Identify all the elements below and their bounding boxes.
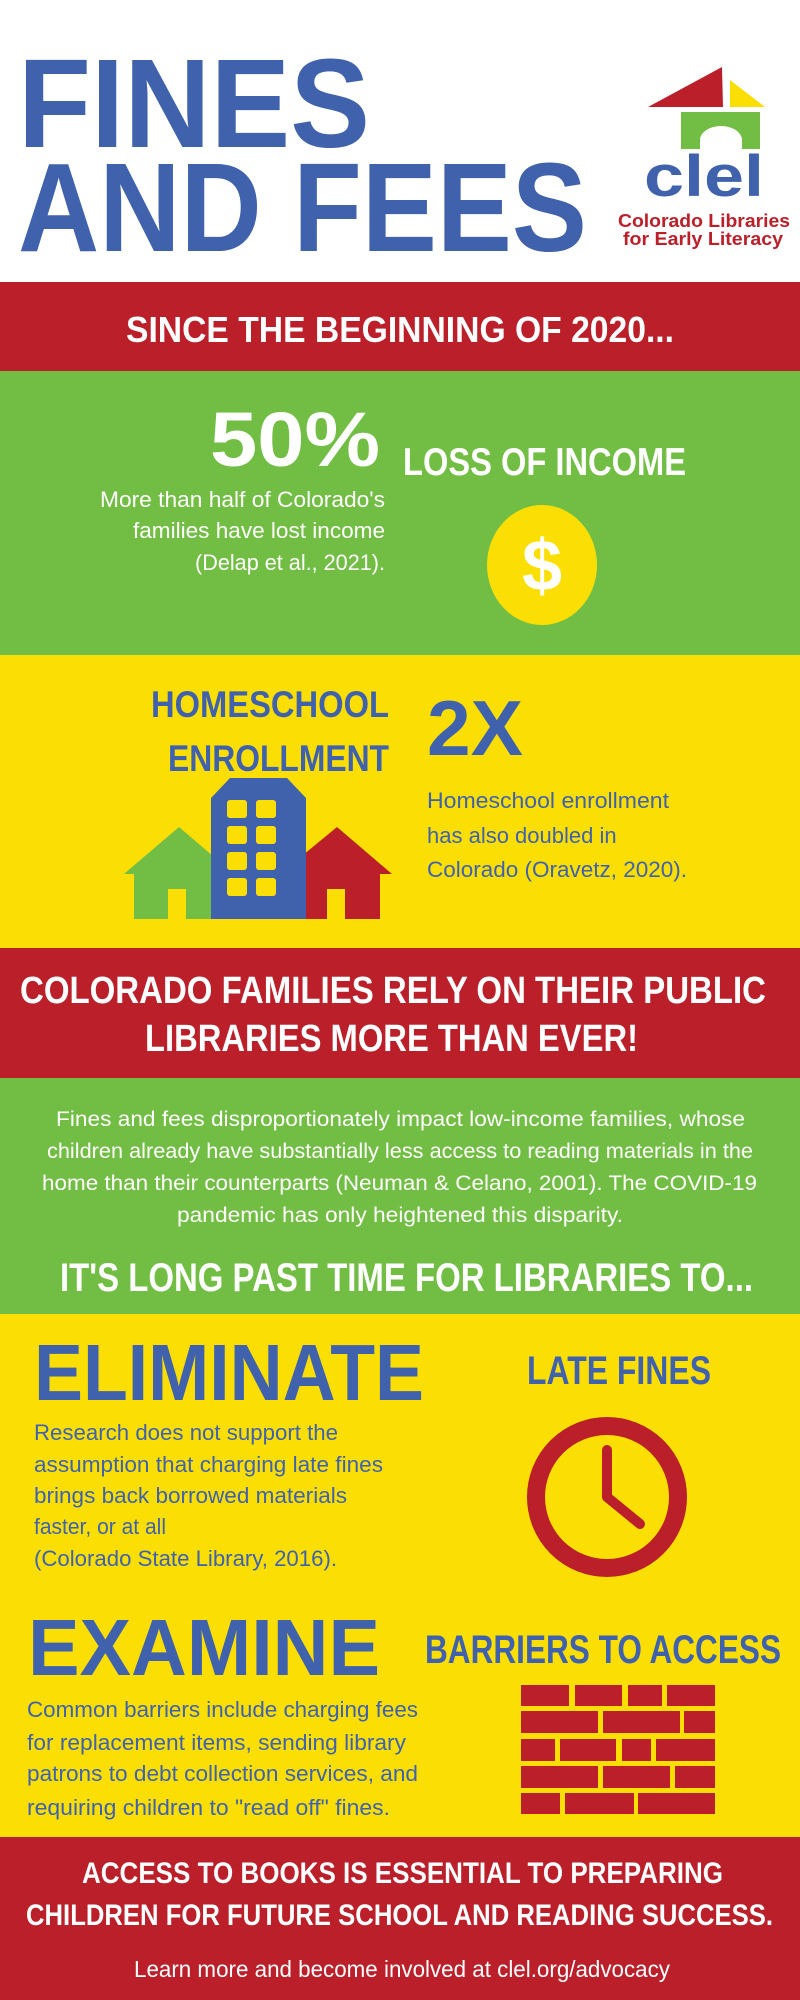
text: disparity paragraph: Fines and fees disproportionately impact low-income families, whose xyxy=(56,1108,745,1131)
text: eliminate paragraph: faster, or at all xyxy=(34,1514,166,1539)
text: homeschool description: Colorado (Oravetz, 2020). xyxy=(427,857,687,882)
text: examine paragraph: requiring children to "read off" fines. xyxy=(27,1795,390,1820)
text: examine paragraph: for replacement items, sending library xyxy=(27,1730,406,1755)
title: FINES xyxy=(18,33,370,174)
icon: houses xyxy=(124,778,392,919)
icon: dollar coin xyxy=(487,505,597,625)
icon: clock xyxy=(536,1426,678,1568)
footer banner: ACCESS TO BOOKS IS ESSENTIAL TO PREPARING xyxy=(82,1857,723,1890)
text: income description: families have lost income xyxy=(133,518,385,543)
title: AND FEES xyxy=(18,137,587,278)
logo: CLEL: Colorado Libraries xyxy=(618,211,790,231)
heading: loss of income: LOSS OF INCOME xyxy=(403,441,686,484)
panel: eliminate / examine xyxy=(0,1314,800,1837)
banner: rely on libraries xyxy=(0,948,800,1078)
text: examine paragraph xyxy=(27,1697,418,1820)
text: disparity paragraph: children already have substantially less access to reading materials in the xyxy=(47,1140,753,1163)
banner: since 2020 xyxy=(0,282,800,371)
text: examine paragraph: patrons to debt collection services, and xyxy=(27,1761,418,1786)
logo: CLEL: for Early Literacy xyxy=(623,229,783,249)
text: homeschool description: has also doubled in xyxy=(427,823,617,848)
text: eliminate paragraph: Research does not support the xyxy=(34,1420,338,1445)
panel: loss of income xyxy=(0,371,800,655)
heading: homeschool enrollment xyxy=(151,684,389,779)
logo: CLEL xyxy=(618,67,790,249)
footer banner xyxy=(0,1837,800,2000)
text: eliminate paragraph: brings back borrowed materials xyxy=(34,1483,347,1508)
panel: homeschool xyxy=(0,655,800,948)
stat: 2X: 2X xyxy=(427,684,523,772)
heading: late fines: LATE FINES xyxy=(527,1349,711,1393)
logo: CLEL: clel xyxy=(644,144,764,209)
text: income description xyxy=(100,487,385,575)
panel: disparity xyxy=(0,1078,800,1314)
title xyxy=(18,33,587,278)
text: homeschool description xyxy=(427,788,687,882)
banner: rely on libraries: LIBRARIES MORE THAN EVER! xyxy=(145,1018,638,1060)
heading: examine: EXAMINE xyxy=(28,1603,380,1692)
text: eliminate paragraph xyxy=(34,1420,383,1571)
heading: homeschool enrollment: HOMESCHOOL xyxy=(151,684,389,725)
icon: dollar coin: $ xyxy=(522,526,562,606)
heading: eliminate: ELIMINATE xyxy=(34,1328,424,1417)
banner: since 2020: SINCE THE BEGINNING OF 2020... xyxy=(126,309,674,350)
icon: brick wall xyxy=(521,1685,715,1814)
text: income description: More than half of Colorado's xyxy=(100,487,385,512)
footer banner: Learn more and become involved at clel.org/advocacy xyxy=(134,1956,670,1982)
text: disparity paragraph: pandemic has only heightened this disparity. xyxy=(177,1204,623,1227)
text: eliminate paragraph: assumption that charging late fines xyxy=(34,1452,383,1477)
text: examine paragraph: Common barriers include charging fees xyxy=(27,1697,418,1722)
text: eliminate paragraph: (Colorado State Library, 2016). xyxy=(34,1546,337,1571)
text: disparity paragraph xyxy=(42,1108,757,1227)
heading: homeschool enrollment: ENROLLMENT xyxy=(168,738,389,779)
text: income description: (Delap et al., 2021). xyxy=(195,550,385,575)
stat: 50%: 50% xyxy=(210,397,380,483)
text: disparity paragraph: home than their counterparts (Neuman & Celano, 2001). The COVID-19 xyxy=(42,1172,757,1195)
text: homeschool description: Homeschool enrollment xyxy=(427,788,669,813)
